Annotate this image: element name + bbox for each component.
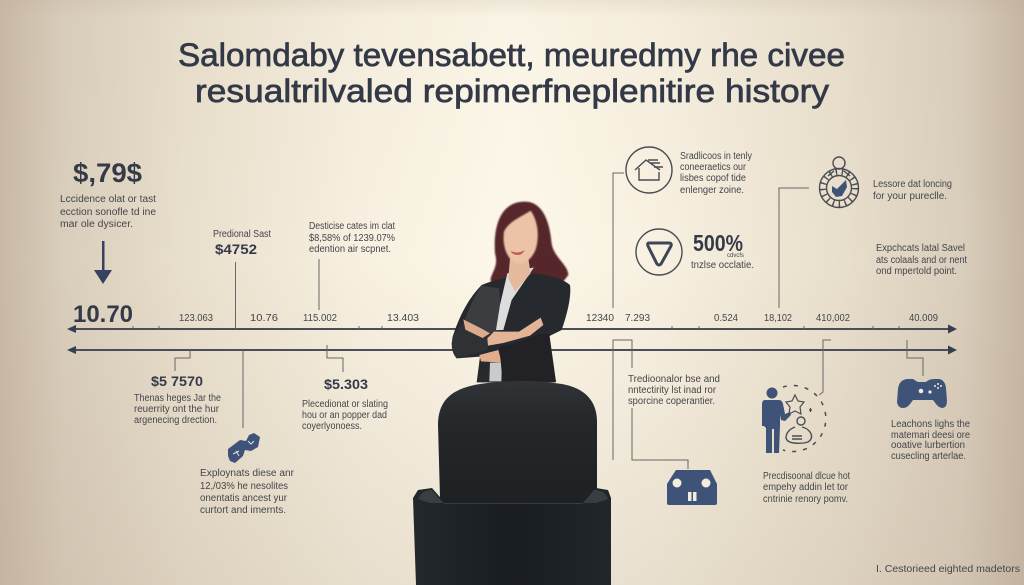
callout: home icon text: coneeraetics our bbox=[680, 162, 747, 173]
callout: top left figure: mar ole dysicer. bbox=[60, 219, 133, 230]
callout: decisive rates bbox=[309, 221, 395, 310]
callout: 500 percent bbox=[636, 229, 754, 275]
axis labels: 40.009 bbox=[909, 313, 938, 324]
footer note: I. Cestorieed eighted madetors bbox=[876, 564, 1020, 575]
callout: gamepad bbox=[891, 340, 970, 462]
axis labels: 12340 bbox=[586, 313, 614, 324]
axis labels: 123.063 bbox=[179, 313, 213, 324]
callout: gamepad: matemari deesi ore bbox=[891, 430, 970, 441]
axis labels: 0.524 bbox=[714, 313, 738, 324]
callout: person with star: Precdisoonal dlcue hot bbox=[763, 471, 850, 482]
title: resualtrilvaled repimerfneplenitire history bbox=[195, 73, 829, 109]
callout: home icon text: lisbes copof tide bbox=[680, 173, 746, 184]
callout: 500 percent: cdvcfs bbox=[727, 253, 744, 259]
icon: blue device bbox=[667, 470, 717, 505]
callout: top left figure: Lccidence olat or tast bbox=[60, 194, 156, 205]
callout: explicit text: ond mpertold point. bbox=[876, 266, 957, 277]
chair back bbox=[438, 381, 597, 514]
callout: employment: Exploynats diese anr bbox=[200, 468, 295, 479]
chair and presenter bbox=[413, 202, 611, 585]
icon: inverted triangle in circle bbox=[636, 229, 682, 275]
callout: explicit text: Expchcats latal Savel bbox=[876, 243, 965, 254]
callout: lower left value: reuerrity ont the hur bbox=[134, 404, 220, 415]
callout: home icon text: enlenger zoine. bbox=[680, 185, 744, 196]
axis labels: 7.293 bbox=[625, 313, 650, 324]
callout: predicted cost bbox=[213, 229, 271, 329]
callout: lower middle value: coyerlyonoess. bbox=[302, 421, 362, 432]
callout: predicted cost: Predional Sast bbox=[213, 229, 271, 240]
callout: person with star: empehy addin let tor bbox=[763, 482, 849, 493]
callout: lower middle value: Plecedionat or slating bbox=[302, 399, 388, 410]
callout: medal icon text bbox=[779, 157, 952, 308]
callout: employment: 12,/03% he nesolites bbox=[200, 481, 288, 492]
title: Salomdaby tevensabett, meuredmy rhe civee bbox=[178, 37, 845, 73]
callout: lower middle value: hou or an popper dad bbox=[302, 410, 387, 421]
callout: employment: onentatis ancest yur bbox=[200, 493, 288, 504]
callout: lower left value bbox=[134, 350, 221, 426]
title bbox=[178, 37, 845, 109]
icon: blue blocks bbox=[228, 433, 260, 463]
callout: top left figure bbox=[60, 158, 156, 230]
callout: lower left value: argenecing drection. bbox=[134, 415, 217, 426]
axis labels: 410,002 bbox=[816, 313, 850, 324]
start value: 10.70 bbox=[73, 301, 133, 328]
bottom timeline axis bbox=[67, 346, 957, 354]
callout: lower left value: Thenas heges Jar the bbox=[134, 393, 221, 404]
callout: gamepad: cusecling arterlae. bbox=[891, 451, 966, 462]
axis labels: 18,102 bbox=[764, 313, 792, 324]
callout: explicit text bbox=[876, 243, 967, 277]
callout: decisive rates: edention air scpnet. bbox=[309, 244, 391, 255]
top timeline axis bbox=[67, 324, 957, 334]
callout: predicted cost: $4752 bbox=[215, 241, 257, 257]
callout: person with star: cntrinie renory pomv. bbox=[763, 494, 848, 505]
callout: employment: curtort and imernts. bbox=[200, 505, 286, 516]
icon: person with star bbox=[762, 386, 826, 453]
callout: traditional base: nntectirity lst inad ror bbox=[628, 385, 717, 396]
callout: decisive rates: $8,58% of 1239.07% bbox=[309, 233, 395, 244]
axis labels bbox=[179, 313, 938, 324]
callout: 500 percent: 500% bbox=[693, 230, 743, 256]
callout: person with star bbox=[762, 340, 850, 505]
callout: medal icon text: Lessore dat loncing bbox=[873, 179, 952, 190]
callout: lower left value: $5 7570 bbox=[151, 373, 203, 389]
chair base bbox=[413, 488, 611, 585]
callout: traditional base: Tredioonalor bse and bbox=[628, 374, 720, 385]
callout: lower middle value bbox=[302, 345, 388, 432]
callout: medal icon text: for your pureclle. bbox=[873, 191, 947, 202]
callout: traditional base bbox=[613, 340, 720, 505]
callout: gamepad: ooative lurbertion bbox=[891, 440, 965, 451]
callout: home icon text: Sradlicoos in tenly bbox=[680, 151, 752, 162]
icon: gamepad bbox=[897, 379, 947, 408]
callout: traditional base: sporcine coperantier. bbox=[628, 396, 715, 407]
callout: 500 percent: tnzlse occlatie. bbox=[691, 260, 754, 271]
callout: explicit text: ats colaals and or nent bbox=[876, 255, 967, 266]
callout: top left figure: $,79$ bbox=[73, 158, 142, 188]
callout: lower middle value: $5.303 bbox=[324, 376, 368, 392]
arrow: down bbox=[94, 241, 112, 284]
callout: decisive rates: Desticise cates im clat bbox=[309, 221, 395, 232]
icon: medal with check bbox=[820, 157, 858, 208]
axis labels: 10.76 bbox=[250, 313, 278, 324]
presenter bbox=[452, 202, 570, 382]
callout: top left figure: ecction sonofle td ine bbox=[60, 207, 156, 218]
callout: home icon text bbox=[613, 147, 752, 308]
axis labels: 13.403 bbox=[387, 313, 419, 324]
callout: gamepad: Leachons lighs the bbox=[891, 419, 970, 430]
axis labels: 115.002 bbox=[303, 313, 337, 324]
icon: house in circle bbox=[626, 147, 672, 193]
callout: employment bbox=[200, 350, 295, 516]
